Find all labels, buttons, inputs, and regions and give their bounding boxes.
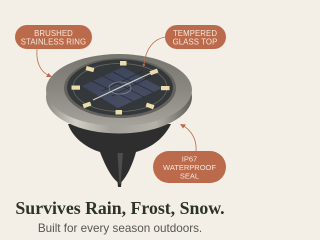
callout: IP67 waterproof seal: WATERPROOF (163, 163, 216, 172)
LED lights (72, 61, 170, 114)
callout: IP67 waterproof seal (153, 124, 226, 183)
callout: brushed stainless ring: STAINLESS RING (21, 37, 86, 46)
subtitle: Built for every season outdoors. (38, 222, 202, 235)
callout: tempered glass top: GLASS TOP (173, 37, 217, 46)
callout: IP67 waterproof seal: IP67 (182, 154, 197, 164)
callout: tempered glass top: TEMPERED (173, 29, 217, 38)
callout: brushed stainless ring (15, 25, 92, 77)
black base and ground spike (68, 124, 171, 187)
stainless steel rim (46, 54, 192, 134)
glass top and solar panel (67, 60, 173, 116)
callout: tempered glass top (143, 25, 226, 66)
callout: brushed stainless ring: BRUSHED (34, 29, 73, 38)
product: solar disc light (46, 54, 192, 187)
infographic canvas (15, 25, 226, 235)
title: Survives Rain, Frost, Snow. (15, 198, 225, 218)
callout: IP67 waterproof seal: SEAL (180, 172, 199, 180)
